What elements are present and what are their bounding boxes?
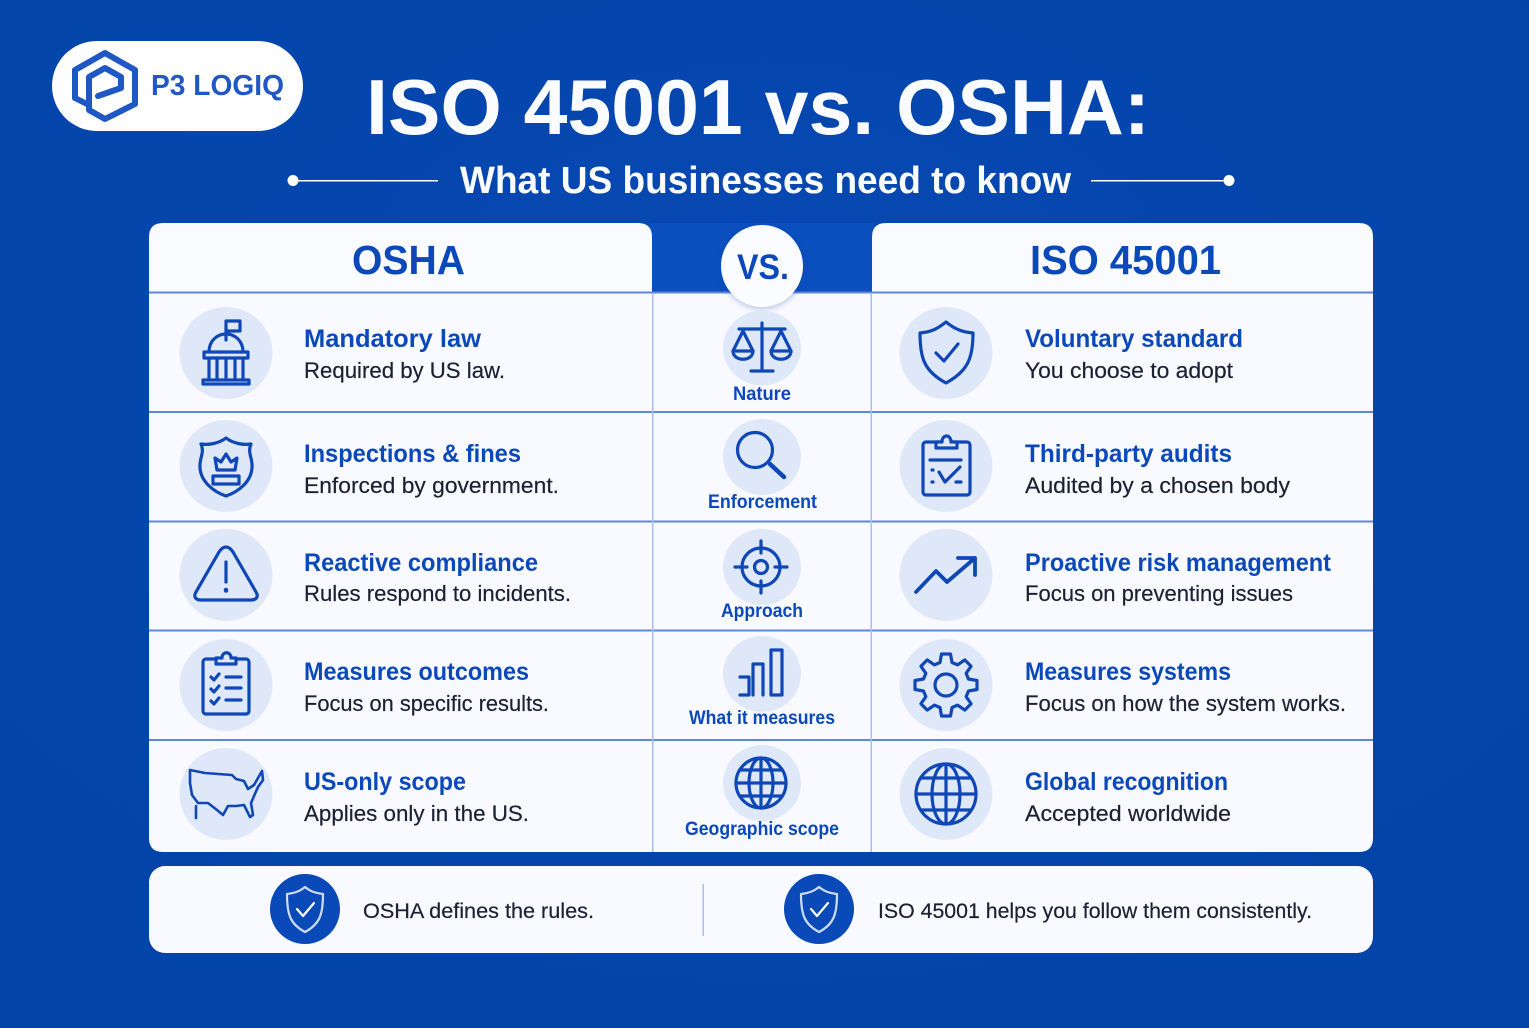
icon: globe large xyxy=(916,764,976,824)
center: what it measures xyxy=(689,636,835,729)
OSHA: inspections and fines: Enforced by government. xyxy=(304,473,559,498)
ISO 45001 column header xyxy=(872,223,1373,292)
center: nature xyxy=(723,310,801,405)
icon: bar chart xyxy=(740,650,782,695)
center: nature: Nature xyxy=(733,384,791,405)
comparison table xyxy=(149,223,1373,852)
row: geographic scope xyxy=(180,745,1231,840)
logo: P3 LOGIQ xyxy=(52,41,303,131)
subtitle with decorative lines: What US businesses need to know xyxy=(460,160,1071,202)
center: geographic scope: Geographic scope xyxy=(685,819,839,840)
OSHA: inspections and fines xyxy=(180,420,559,512)
OSHA: measures outcomes xyxy=(180,639,549,731)
OSHA: US-only scope: US-only scope xyxy=(304,768,466,796)
icon: target xyxy=(735,541,787,593)
OSHA: reactive compliance: Rules respond to incidents. xyxy=(304,581,571,606)
center: geographic scope xyxy=(685,745,839,840)
icon: shield xyxy=(287,887,323,932)
OSHA: inspections and fines: Inspections & fines xyxy=(304,440,521,468)
OSHA: measures outcomes: Measures outcomes xyxy=(304,658,529,686)
ISO: global recognition: Global recognition xyxy=(1025,768,1228,796)
icon: shield xyxy=(801,887,837,932)
table body panel xyxy=(149,292,1373,852)
OSHA: mandatory law: Required by US law. xyxy=(304,358,505,383)
center: enforcement xyxy=(708,419,818,513)
OSHA column header xyxy=(149,223,652,292)
ISO: global recognition: Accepted worldwide xyxy=(1025,801,1231,826)
ISO: global recognition xyxy=(900,748,1231,840)
row: approach xyxy=(180,529,1332,622)
OSHA: mandatory law xyxy=(180,307,505,399)
vs badge xyxy=(721,225,803,309)
ISO: voluntary standard xyxy=(900,307,1243,399)
icon: trend arrow xyxy=(916,558,975,592)
icon: audit clipboard xyxy=(923,436,970,495)
icon: globe small xyxy=(736,758,786,808)
footer: ISO statement xyxy=(784,874,1312,944)
OSHA: US-only scope: Applies only in the US. xyxy=(304,801,529,826)
vs badge: VS. xyxy=(737,248,789,287)
title: ISO 45001 vs. OSHA: xyxy=(366,63,1150,151)
footer: OSHA statement xyxy=(270,874,594,944)
center: what it measures: What it measures xyxy=(689,708,835,729)
ISO: proactive risk management: Proactive risk management xyxy=(1025,549,1332,577)
icon: scales xyxy=(733,323,791,371)
subtitle with decorative lines xyxy=(288,160,1234,202)
OSHA: mandatory law: Mandatory law xyxy=(304,325,482,353)
icon: gear xyxy=(915,654,977,716)
ISO: proactive risk management: Focus on preventing issues xyxy=(1025,581,1293,606)
icon: checklist xyxy=(203,653,249,714)
OSHA: reactive compliance xyxy=(180,529,571,621)
ISO: third-party audits: Audited by a chosen body xyxy=(1025,473,1291,498)
center: enforcement: Enforcement xyxy=(708,492,818,513)
ISO: proactive risk management xyxy=(900,529,1332,621)
icon: warning triangle xyxy=(195,547,257,600)
ISO: measures systems: Measures systems xyxy=(1025,658,1231,686)
footer: ISO statement: ISO 45001 helps you follow them consistently. xyxy=(878,899,1312,923)
row: what it measures xyxy=(180,636,1346,731)
OSHA: measures outcomes: Focus on specific results. xyxy=(304,691,549,716)
icon: US map xyxy=(190,770,263,818)
center: approach: Approach xyxy=(721,601,803,622)
OSHA: reactive compliance: Reactive compliance xyxy=(304,549,538,577)
icon: shield check xyxy=(920,322,973,383)
ISO: third-party audits: Third-party audits xyxy=(1025,440,1232,468)
ISO: voluntary standard: You choose to adopt xyxy=(1025,358,1234,383)
ISO: measures systems: Focus on how the system works. xyxy=(1025,691,1346,716)
ISO: third-party audits xyxy=(900,420,1291,512)
icon: police badge xyxy=(200,438,252,496)
icon: capitol building xyxy=(203,321,249,384)
icon: magnifying glass xyxy=(738,432,784,477)
row: nature xyxy=(180,307,1243,405)
OSHA column header: OSHA xyxy=(352,237,465,283)
footer: OSHA statement: OSHA defines the rules. xyxy=(363,899,594,923)
center: approach xyxy=(721,529,803,622)
ISO: voluntary standard: Voluntary standard xyxy=(1025,325,1243,353)
row: enforcement xyxy=(180,419,1291,513)
ISO: measures systems xyxy=(900,639,1346,731)
logo: P3 LOGIQ: P3 LOGIQ xyxy=(151,70,284,102)
ISO 45001 column header: ISO 45001 xyxy=(1030,237,1221,283)
footer summary bar xyxy=(149,866,1373,953)
vs header band xyxy=(650,223,874,292)
OSHA: US-only scope xyxy=(180,748,529,840)
